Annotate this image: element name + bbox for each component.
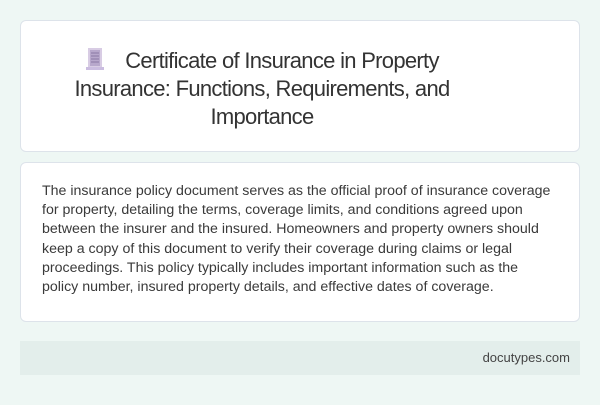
text block: The insurance policy document serves as the official proof of insurance coverage for property, detailing the terms, coverage limits, and conditions agreed upon between the insurer and the insured. Homeowners and property owners should keep a copy of this document to verify their coverage during claims or legal proceedings. This policy typically includes important information such as the policy number, insured property details, and effective dates of coverage. [42,183,550,295]
title: Certificate of Insurance in Property Insurance: Functions, Requirements, and Importance [74,48,450,129]
panel: title card [20,20,580,152]
footer: docutypes.com [483,350,570,365]
panel: description [20,162,580,322]
footer [20,341,580,375]
